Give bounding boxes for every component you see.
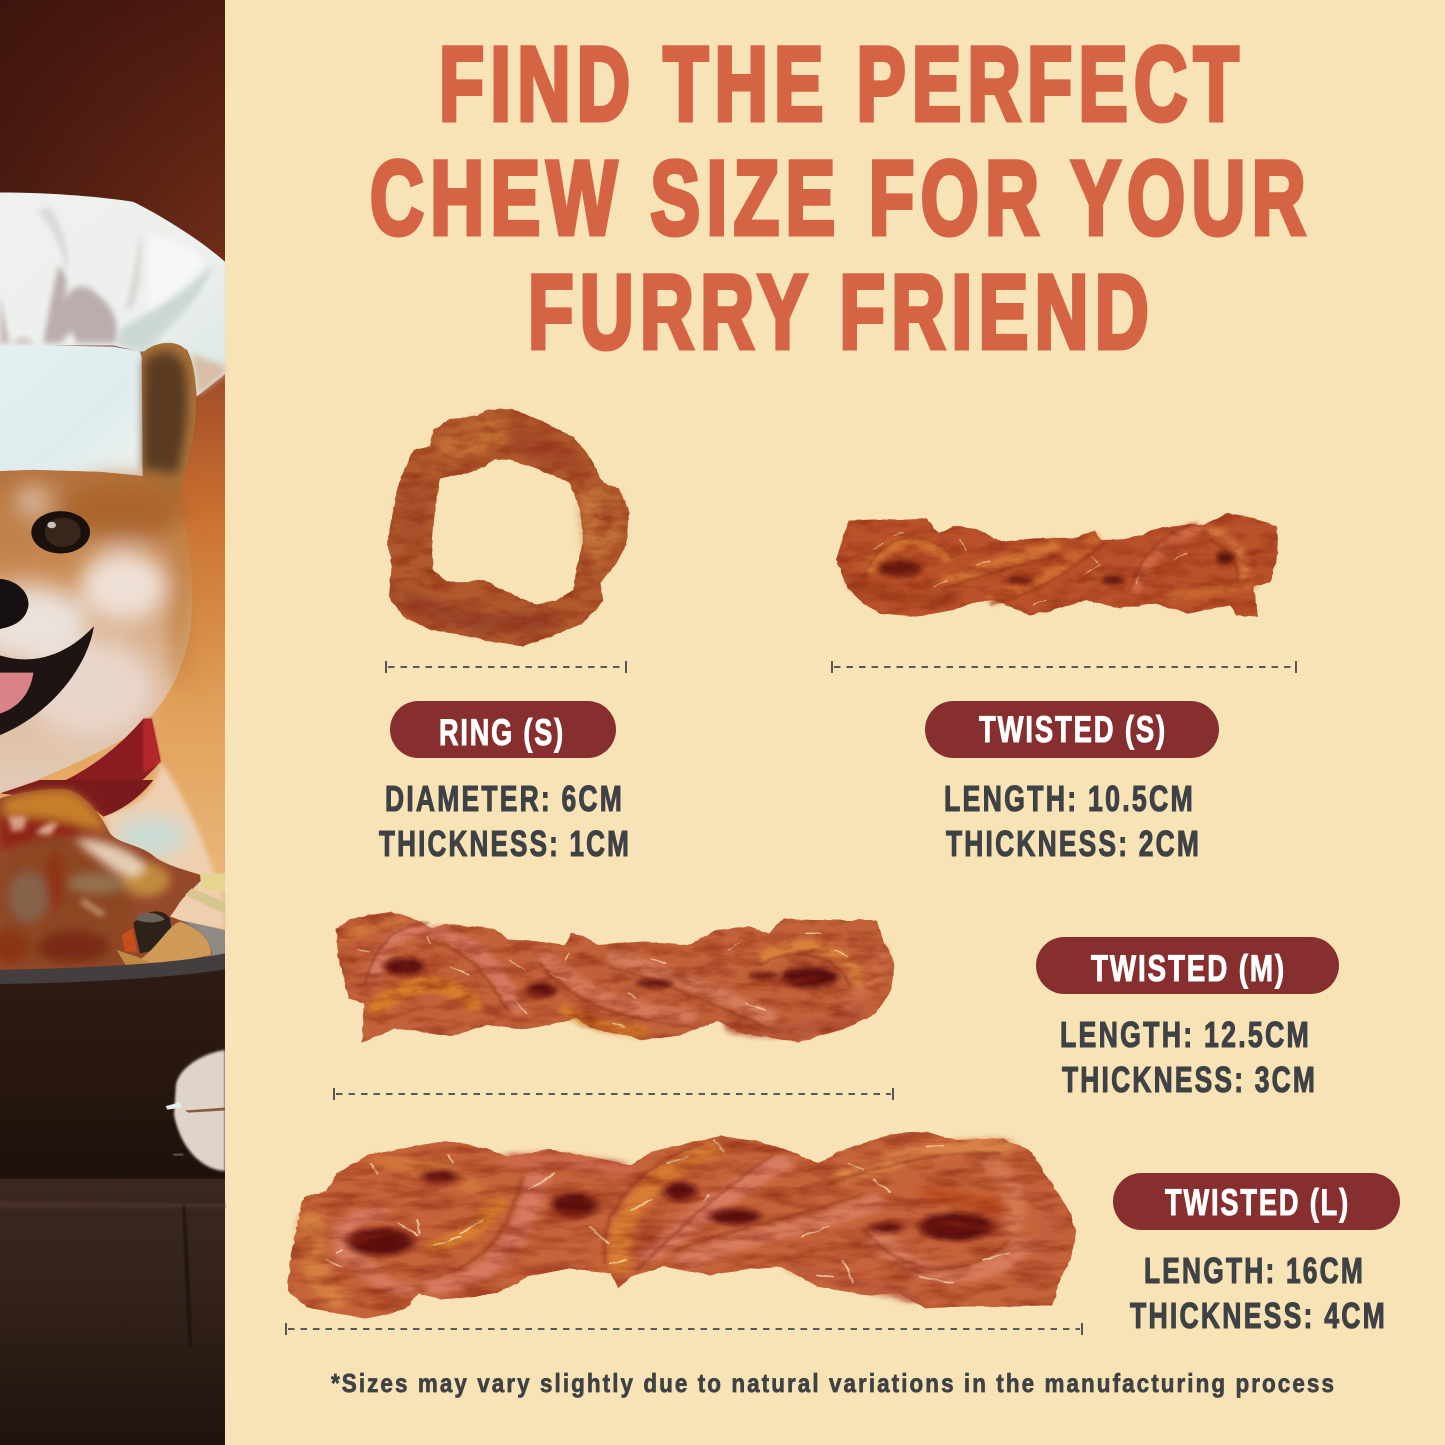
- size specs: THICKNESS: 1CM: [379, 823, 631, 864]
- dimension line: [286, 1323, 1082, 1335]
- size label pill: [925, 701, 1219, 758]
- eye: [31, 511, 90, 554]
- bandana lower: [0, 780, 153, 817]
- title: [370, 26, 1312, 371]
- size specs: THICKNESS: 3CM: [1062, 1059, 1317, 1100]
- panel: twisted small: [832, 513, 1296, 864]
- title line 3: FURRY FRIEND: [528, 254, 1155, 371]
- chest fur: [97, 762, 225, 930]
- panel: chef dog photo: [0, 0, 225, 1445]
- turkey legs: [200, 873, 225, 892]
- chew photo: twisted small: [836, 513, 1278, 617]
- pan rim: [0, 953, 225, 984]
- size label pill: TWISTED (S): [979, 709, 1167, 750]
- size specs: [944, 778, 1201, 864]
- panel: twisted large: [286, 1132, 1400, 1336]
- hat band: [0, 345, 143, 476]
- size label pill: TWISTED (M): [1091, 948, 1286, 989]
- stone ledge: [0, 1179, 225, 1445]
- face: [0, 470, 192, 794]
- size label pill: [1036, 937, 1339, 994]
- paw: [166, 1050, 225, 1171]
- size specs: [379, 778, 631, 864]
- pan, paw and stone ledge: [0, 942, 225, 1445]
- chest, turkey and pan rim: [0, 762, 225, 984]
- dimension line: [832, 661, 1296, 673]
- mouth and tongue: [0, 626, 94, 735]
- dog head and chef hat: [0, 192, 225, 810]
- chew photo: twisted large: [288, 1132, 1076, 1318]
- dimension line: [334, 1088, 893, 1100]
- size specs: THICKNESS: 2CM: [946, 823, 1201, 864]
- ear: [142, 343, 196, 501]
- size specs: DIAMETER: 6CM: [385, 778, 624, 819]
- size specs: [1060, 1014, 1317, 1100]
- panel: twisted medium: [334, 912, 1339, 1100]
- panel: ring small: [379, 408, 631, 864]
- roast turkey: [0, 789, 212, 970]
- plate: [180, 920, 225, 958]
- pan body: [0, 942, 225, 1184]
- size specs: LENGTH: 16CM: [1144, 1250, 1365, 1291]
- size label pill: [390, 701, 616, 758]
- chew photo: twisted medium: [336, 912, 895, 1043]
- bandana: [20, 719, 161, 810]
- size specs: LENGTH: 10.5CM: [944, 778, 1195, 819]
- size label pill: [1113, 1173, 1400, 1230]
- size label pill: RING (S): [439, 712, 565, 753]
- nose: [0, 579, 28, 629]
- chew photo: ring: [387, 408, 629, 646]
- size specs: LENGTH: 12.5CM: [1060, 1014, 1311, 1055]
- size specs: [1130, 1250, 1387, 1336]
- chef hat puff: [0, 192, 225, 396]
- dimension line: [386, 661, 626, 673]
- stuffing: [117, 911, 211, 967]
- size label pill: TWISTED (L): [1165, 1182, 1350, 1223]
